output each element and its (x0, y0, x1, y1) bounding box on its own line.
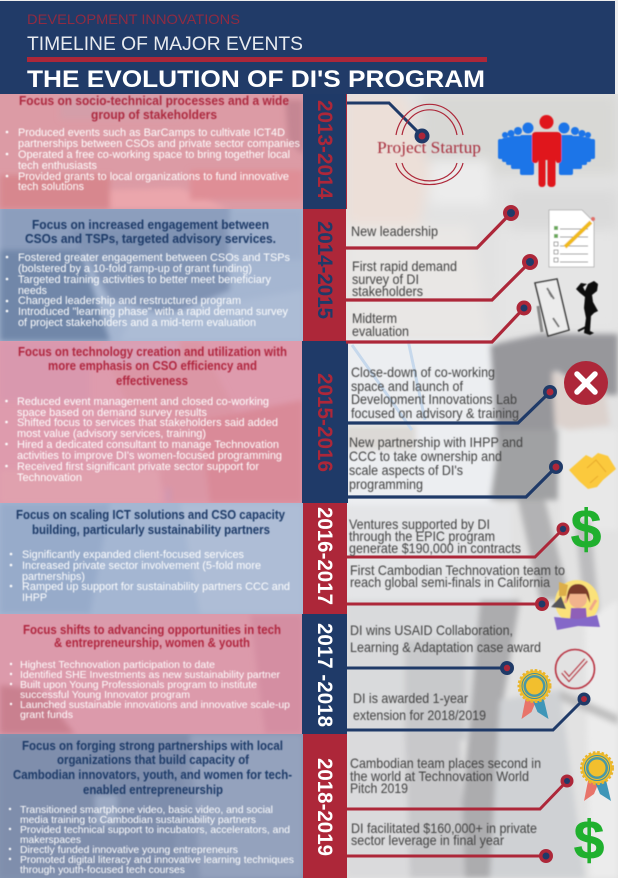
bullets: 2014-2015: (bolstered by a 10-fold ramp-up of grant funding) (18, 263, 252, 275)
bullets: 2018-2019: through youth-focused tech courses (20, 864, 185, 876)
heading: 2015-2016: more emphasis on CSO efficiency and (48, 359, 257, 373)
event: technovation semi-finals (346, 562, 565, 611)
label: Cambodian team places second in (350, 755, 541, 771)
bullets: 2015-2016: space based on demand survey results (17, 407, 207, 419)
icon: handshake (569, 453, 616, 489)
heading: 2016-2017: building, particularly sustainability partners (32, 523, 270, 537)
heading: 2015-2016: effectiveness (116, 374, 188, 388)
heading: 2018-2019: Focus on forging strong partnerships with local (22, 739, 283, 753)
label (350, 622, 541, 655)
icon: red cross (564, 361, 608, 405)
heading: 2018-2019: enabled entrepreneurship (83, 783, 223, 797)
panel: 2014-2015 summary (0, 205, 303, 341)
bullets: 2013-2014: Operated a free co-working space to bring together local (18, 149, 290, 161)
label: Midterm (352, 310, 397, 326)
bullets: 2015-2016: Shifted focus to services that stakeholders said added (17, 417, 278, 429)
bullets: 2014-2015 (6, 252, 290, 329)
label: through the EPIC program (349, 528, 495, 544)
divider rule (27, 57, 487, 62)
icon: green dollar 2 (574, 809, 604, 871)
bullets: 2017-2018: Identified SHE Investments as new sustainability partner (20, 669, 280, 681)
year: 2016-2017: 2016-2017 (313, 507, 336, 605)
label: scale aspects of DI's (349, 462, 463, 478)
bullets: 2015-2016: Received first significant private sector support for (17, 461, 259, 473)
bullets: 2015-2016: Technovation (17, 472, 82, 484)
event: demand survey (346, 254, 538, 300)
label: extension for 2018/2019 (353, 707, 486, 723)
panel: 2018-2019 summary (0, 734, 303, 878)
bullets: 2018-2019: Promoted digital literacy and innovative learning techniques (20, 854, 294, 866)
bullets: 2016-2017: Significantly expanded client-focused services (22, 549, 244, 561)
event: new leadership (346, 205, 519, 248)
badge arcs (396, 104, 463, 185)
year: 2018-2019: 2018-2019 (313, 758, 336, 856)
heading: 2013-2014 (19, 94, 289, 122)
label: DI wins USAID Collaboration, (350, 622, 513, 638)
heading: 2015-2016: Focus on technology creation and utilization with (18, 345, 287, 359)
bullets: 2018-2019: Transitioned smartphone video, basic video, and social (20, 804, 273, 816)
panel: 2016-2017 summary (0, 503, 303, 614)
icon: checklist document (549, 210, 595, 267)
label: sector leverage in final year (351, 832, 504, 848)
bullets: 2016-2017 (10, 549, 290, 604)
bullets: 2014-2015: needs (18, 285, 47, 297)
bullets: 2013-2014 (6, 127, 300, 193)
bullets: 2017-2018: successful Young Innovator program (20, 689, 190, 701)
label: generate $190,000 in contracts (349, 540, 521, 556)
bullets: 2014-2015: Changed leadership and restructured program (18, 295, 241, 307)
timeline band (302, 94, 348, 878)
heading: 2016-2017: Focus on scaling ICT solutions and CSO capacity (16, 508, 285, 522)
bullets: 2016-2017: Ramped up support for sustainability partners CCC and (22, 581, 290, 593)
icon: group of people (498, 115, 595, 187)
icon: award rosette 2 (582, 752, 612, 801)
icon: mirror and silhouette (535, 279, 598, 336)
heading: 2014-2015 (25, 218, 276, 246)
bullets: 2014-2015: Targeted training activities to better meet beneficiary (18, 274, 271, 286)
bullets: 2013-2014: tech solutions (18, 181, 84, 193)
event: project startup (347, 103, 481, 185)
year: 2014-2015: 2014-2015 (313, 221, 336, 319)
label: Ventures supported by DI (349, 516, 490, 532)
heading: 2018-2019 (13, 739, 292, 797)
panel: 2015-2016 summary (0, 341, 303, 503)
label: evaluation (352, 323, 409, 339)
label (352, 310, 409, 339)
label: New leadership (351, 223, 438, 239)
bullets: 2013-2014: tech enthusiasts (18, 160, 97, 172)
label: space and launch of (351, 378, 463, 394)
label (349, 516, 521, 556)
bullets: 2014-2015: of project stakeholders and a mid-term evaluation (18, 317, 256, 329)
heading: 2018-2019: organizations that build capacity of (57, 753, 250, 767)
bullets: 2013-2014: partnerships between CSOs and private sector companies (18, 138, 300, 150)
label: Pitch 2019 (350, 780, 408, 796)
icon: girl with trophy (551, 580, 600, 630)
bullets: 2015-2016: Hired a dedicated consultant to manage Technovation (17, 439, 279, 451)
bullets: 2015-2016: most value (advisory services, training) (17, 428, 206, 440)
label: reach global semi-finals in California (350, 574, 550, 590)
event: one-year extension (346, 690, 590, 730)
bullets: 2017-2018: Launched sustainable innovations and innovative scale-up (20, 699, 290, 711)
bullets: 2017-2018: Highest Technovation participation to date (20, 659, 215, 671)
bullets: 2018-2019: Directly funded innovative young entrepreneurs (20, 844, 238, 856)
subtitle: TIMELINE OF MAJOR EVENTS (27, 33, 303, 55)
bullets: 2017-2018 (10, 659, 290, 721)
bullets: 2015-2016: activities to improve DI's women-focused programming (17, 450, 282, 462)
label: Project Startup (377, 138, 481, 157)
bullets: 2016-2017: IHPP (22, 592, 47, 604)
label: the world at Technovation World (350, 768, 529, 784)
bullets: 2014-2015: Introduced "learning phase" with a rapid demand survey (18, 306, 288, 318)
heading: 2014-2015: Focus on increased engagement between (32, 218, 269, 232)
label (350, 562, 565, 590)
year: 2013-2014: 2013-2014 (313, 100, 336, 199)
label (352, 258, 457, 299)
bullets: 2015-2016: Reduced event management and closed co-working (17, 396, 269, 408)
panel: 2017-2018 summary (0, 614, 303, 734)
event: new partnership (348, 434, 563, 497)
label: DI facilitated $160,000+ in private (351, 820, 537, 836)
bullets: 2017-2018: Built upon Young Professionals program to institute (20, 679, 257, 691)
bullets: 2018-2019: media training to Cambodian sustainability partners (20, 814, 256, 826)
label (353, 690, 486, 723)
heading: 2015-2016 (18, 345, 287, 388)
year: 2017-2018: 2017 -2018 (313, 623, 336, 727)
organisation name: DEVELOPMENT INNOVATIONS (27, 11, 240, 27)
event: midterm evaluation (346, 300, 532, 342)
bullets: 2017-2018: grant funds (20, 709, 73, 721)
label (351, 364, 519, 421)
icon: check circle (556, 650, 594, 688)
heading: 2014-2015: CSOs and TSPs, targeted advisory services. (25, 232, 276, 246)
year: 2015-2016: 2015-2016 (313, 373, 336, 472)
bullets: 2018-2019: Provided technical support to incubators, accelerators, and (20, 824, 290, 836)
heading: 2013-2014: Focus on socio-technical processes and a wide (19, 94, 289, 108)
label: First rapid demand (352, 258, 457, 274)
label: DI is awarded 1-year (353, 690, 468, 706)
heading: 2016-2017 (16, 508, 285, 537)
label: CCC to take ownership and (349, 448, 502, 464)
label (349, 434, 523, 492)
bullets: 2013-2014: Provided grants to local organizations to fund innovative (18, 171, 289, 183)
heading: 2013-2014: group of stakeholders (91, 108, 217, 122)
label (351, 820, 537, 848)
header banner (0, 1, 615, 94)
heading: 2017-2018 (23, 623, 281, 650)
panel: 2013-2014 summary (0, 94, 303, 209)
background photo (346, 94, 618, 878)
bullets: 2016-2017: Increased private sector involvement (5-fold more (22, 560, 261, 572)
event: private sector leverage (346, 820, 553, 863)
bullets: 2018-2019 (9, 804, 294, 876)
event: ventures generate contracts (346, 516, 570, 557)
heading: 2017-2018: Focus shifts to advancing opportunities in tech (23, 623, 281, 637)
label: Learning & Adaptation case award (350, 639, 541, 655)
icon: award rosette (519, 670, 550, 719)
label: Close-down of co-working (351, 364, 495, 380)
label: stakeholders (352, 283, 423, 299)
label: programming (349, 476, 423, 492)
bullets: 2013-2014: Produced events such as BarCamps to cultivate ICT4D (18, 127, 285, 139)
heading: 2017-2018: & entrepreneurship, women & youth (54, 636, 250, 650)
bullets: 2016-2017: partnerships) (22, 571, 85, 583)
icon: green dollar (571, 498, 601, 560)
label: Development Innovations Lab (351, 391, 517, 407)
heading: 2018-2019: Cambodian innovators, youth, and women for tech- (13, 768, 292, 782)
main title: THE EVOLUTION OF DI'S PROGRAM (27, 66, 485, 93)
label: focused on advisory & training (351, 405, 519, 421)
label: survey of DI (352, 271, 419, 287)
label (350, 755, 541, 796)
bullets: 2014-2015: Fostered greater engagement between CSOs and TSPs (18, 252, 290, 264)
label: New partnership with IHPP and (349, 434, 523, 450)
event: close-down of co-working space (348, 364, 557, 423)
event: second at world pitch (346, 755, 574, 809)
event: USAID award (346, 622, 541, 675)
bullets: 2015-2016 (5, 396, 282, 484)
bullets: 2018-2019: makerspaces (20, 834, 81, 846)
label: First Cambodian Technovation team to (350, 562, 565, 578)
